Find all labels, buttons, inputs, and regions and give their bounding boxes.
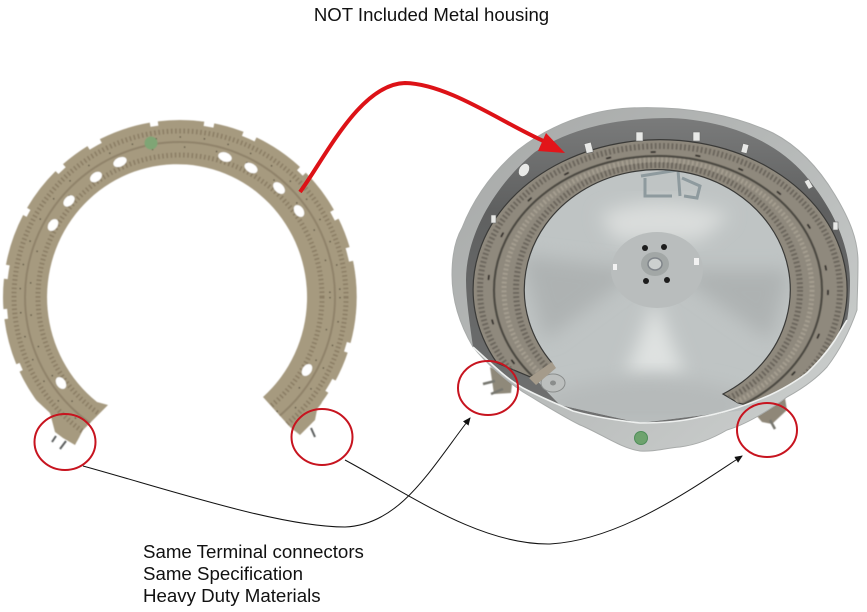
heating element ring (left)	[6, 122, 354, 472]
housing silhouette	[452, 108, 858, 451]
green mark on housing	[634, 432, 648, 444]
feature text block: Same Terminal connectors	[143, 541, 364, 562]
red circle: left terminal	[34, 414, 96, 470]
white retaining tabs	[491, 132, 838, 230]
terminal pins left	[52, 428, 315, 449]
hub	[613, 244, 699, 284]
red curved arrow	[300, 83, 565, 192]
green mark	[144, 136, 158, 150]
feature text block	[143, 541, 364, 606]
terminals under rim	[483, 367, 787, 429]
heater installed	[473, 140, 847, 434]
inner wall	[466, 118, 850, 423]
red circle: housing left terminal	[458, 361, 518, 415]
title: NOT Included Metal housing	[314, 4, 549, 25]
pan highlights	[520, 202, 790, 425]
feature text block: Same Specification	[143, 563, 303, 584]
red circle: right terminal	[292, 409, 352, 465]
front lip highlight	[473, 320, 847, 423]
central raised disc	[611, 232, 703, 308]
bracket on pan	[641, 170, 700, 198]
metal housing assembly (right)	[452, 108, 858, 451]
feature text block: Heavy Duty Materials	[143, 585, 321, 606]
bottom mount boss	[541, 374, 565, 392]
mounting holes	[46, 150, 314, 391]
pan	[500, 160, 815, 423]
red circle: housing right terminal	[737, 403, 797, 457]
black connector arrow 2	[345, 456, 742, 544]
black connector arrow 1	[83, 418, 470, 527]
